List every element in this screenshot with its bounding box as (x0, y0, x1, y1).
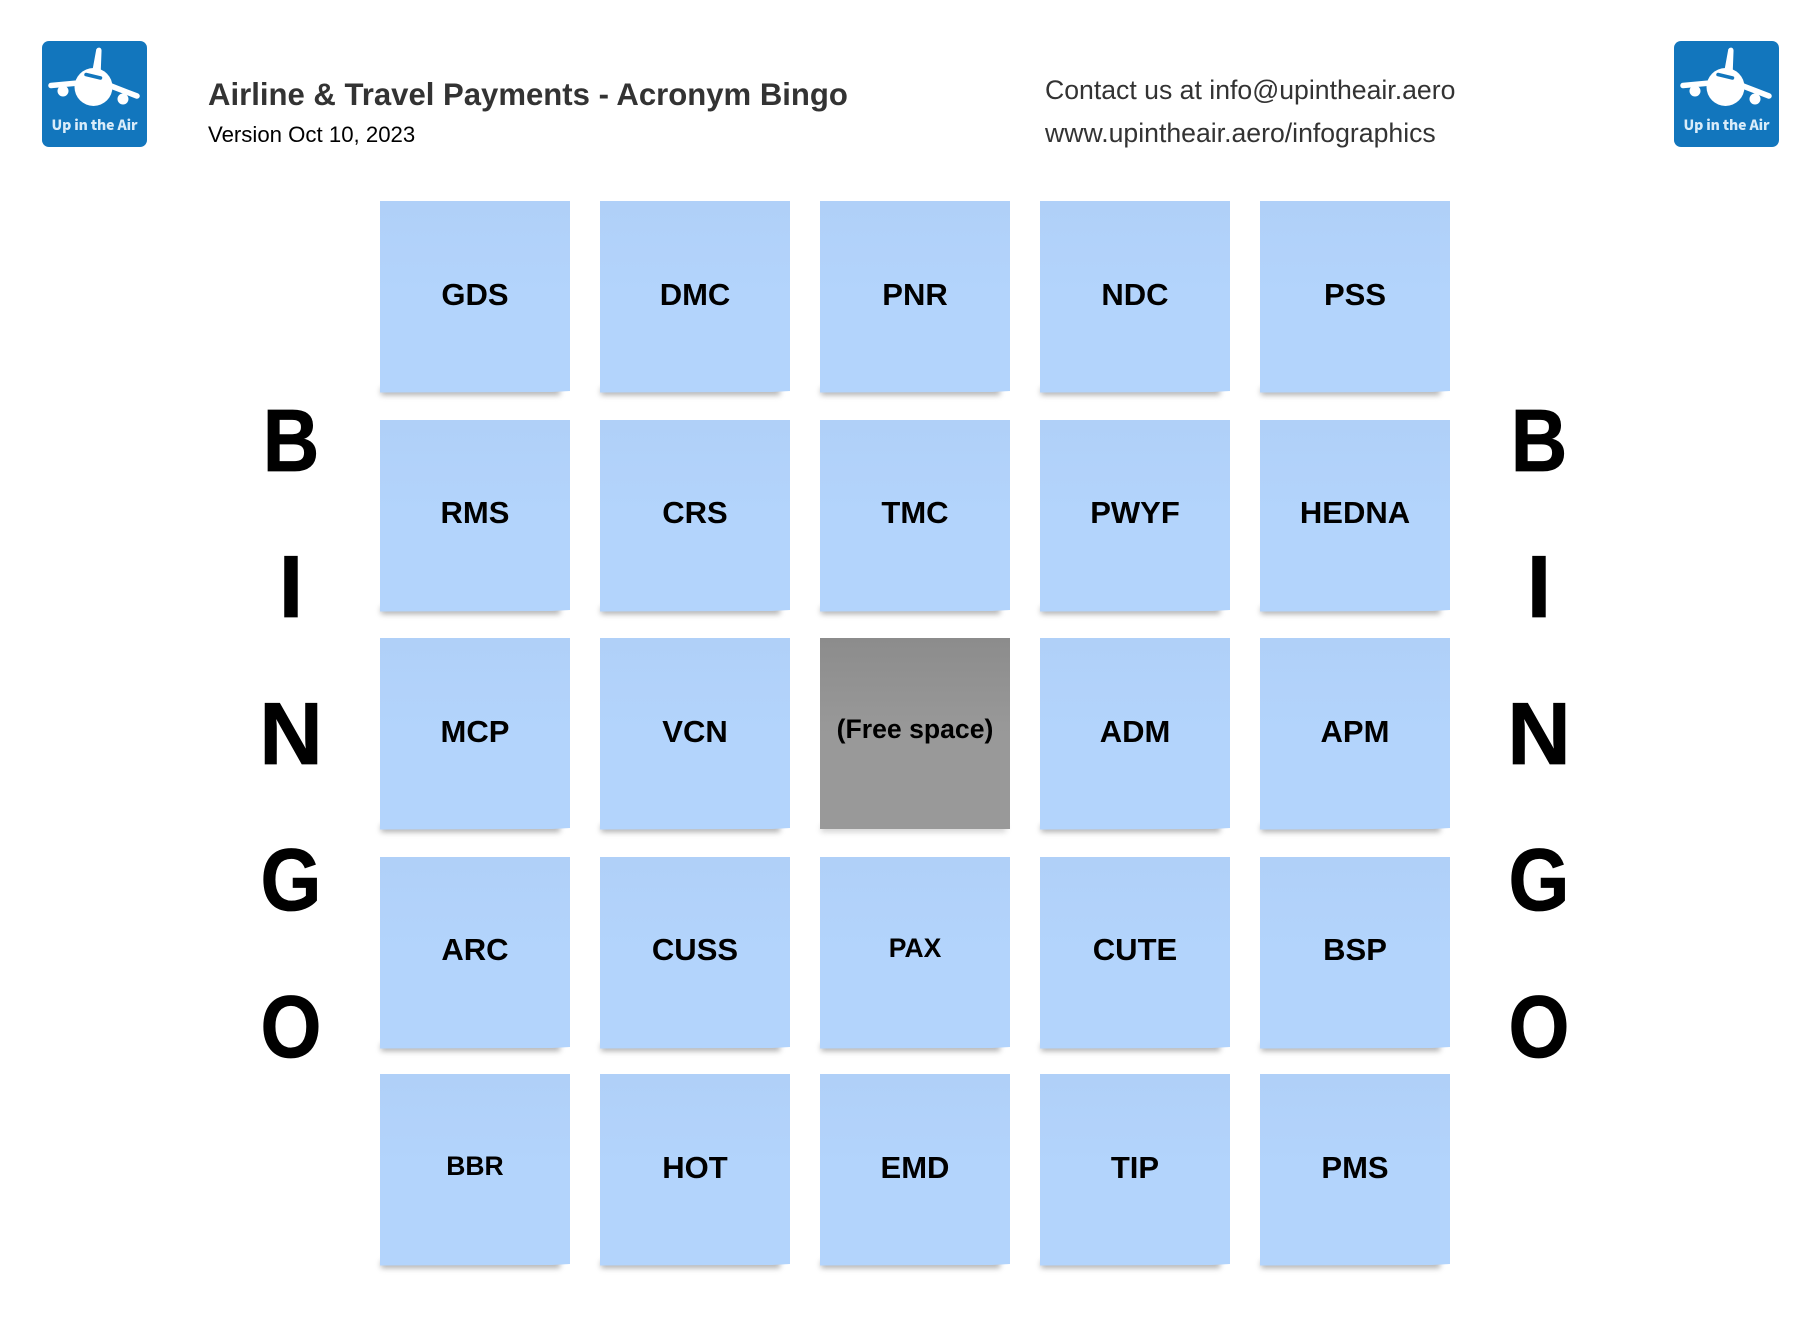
card: BBR (378, 1074, 570, 1272)
icon: left logo: Up in the Air (52, 115, 138, 135)
card: CUTE (1038, 857, 1230, 1054)
card: HOT (598, 1074, 790, 1272)
card: HEDNA (1258, 420, 1450, 618)
right BINGO column: N (1507, 684, 1571, 783)
right BINGO column: B (1511, 391, 1567, 490)
card: PSS: PSS (1324, 277, 1386, 312)
card: GDS (378, 201, 570, 398)
card: VCN: VCN (662, 714, 728, 749)
left BINGO column: N (259, 684, 323, 783)
card: GDS: GDS (441, 277, 509, 312)
card: RMS (378, 420, 570, 618)
card: ADM (1038, 638, 1230, 836)
card: BSP (1258, 857, 1450, 1054)
website url: www.upintheair.aero/infographics (1045, 118, 1436, 148)
card: PAX: PAX (889, 933, 941, 963)
card: PSS (1258, 201, 1450, 398)
contact email: Contact us at info@upintheair.aero (1045, 75, 1455, 105)
right BINGO column (1507, 391, 1571, 1076)
card: APM: APM (1321, 714, 1389, 749)
card: APM (1258, 638, 1450, 836)
card: NDC: NDC (1101, 277, 1169, 312)
card: CRS: CRS (662, 495, 728, 530)
icon: right logo (1674, 41, 1779, 147)
icon: left logo (42, 41, 147, 147)
card: PNR: PNR (882, 277, 948, 312)
card: MCP: MCP (441, 714, 509, 749)
card: BBR: BBR (446, 1151, 504, 1181)
title: Airline & Travel Payments - Acronym Bingo (208, 77, 848, 112)
right BINGO column: G (1509, 830, 1569, 929)
card: PWYF: PWYF (1090, 495, 1180, 530)
card: CUTE: CUTE (1093, 932, 1177, 967)
card: CUSS (598, 857, 790, 1054)
card: VCN (598, 638, 790, 836)
card: PMS (1258, 1074, 1450, 1272)
card: DMC: DMC (660, 277, 730, 312)
version text: Version Oct 10, 2023 (208, 122, 415, 147)
card: PNR (818, 201, 1010, 398)
right BINGO column: O (1509, 977, 1569, 1076)
left BINGO column: G (261, 830, 321, 929)
card: EMD (818, 1074, 1010, 1272)
right BINGO column: I (1527, 537, 1551, 636)
card: PMS: PMS (1321, 1150, 1389, 1185)
card: ADM: ADM (1100, 714, 1170, 749)
card: HEDNA: HEDNA (1300, 495, 1410, 530)
card: free space: (Free space) (837, 714, 993, 744)
card: TMC (818, 420, 1010, 618)
card: DMC (598, 201, 790, 398)
card: free space (819, 638, 1010, 834)
card: TIP (1038, 1074, 1230, 1272)
card: BSP: BSP (1323, 932, 1387, 967)
icon: right logo: Up in the Air (1684, 115, 1770, 135)
card: ARC (378, 857, 570, 1054)
left BINGO column: I (279, 537, 303, 636)
card: CUSS: CUSS (652, 932, 738, 967)
card: RMS: RMS (441, 495, 509, 530)
card: NDC (1038, 201, 1230, 398)
card: HOT: HOT (662, 1150, 728, 1185)
card: TIP: TIP (1111, 1150, 1159, 1185)
card: EMD: EMD (881, 1150, 949, 1185)
card: ARC: ARC (441, 932, 509, 967)
left BINGO column: O (261, 977, 321, 1076)
card: MCP (378, 638, 570, 836)
left BINGO column (259, 391, 323, 1076)
card: PWYF (1038, 420, 1230, 618)
card: CRS (598, 420, 790, 618)
card: PAX (818, 857, 1010, 1054)
card: TMC: TMC (881, 495, 949, 530)
left BINGO column: B (263, 391, 319, 490)
